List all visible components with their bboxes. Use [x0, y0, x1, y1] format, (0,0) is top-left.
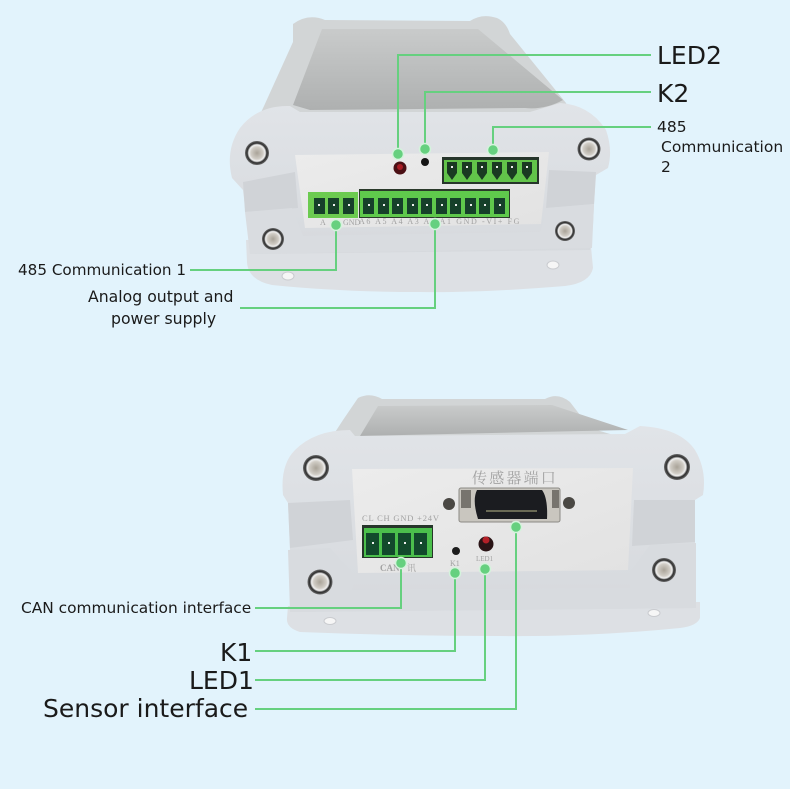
panel caption: sensor port: 传感器端口 — [472, 469, 558, 487]
callout: LED2 — [392, 41, 722, 160]
lower lip — [245, 204, 594, 254]
device: top module: A6 A5 A4 A3 A2 A1 GND -VI+ FG — [359, 217, 521, 226]
panel captions: CL CH GND +24V — [362, 513, 440, 523]
6-pin terminal — [442, 157, 539, 184]
callout: sensor interface — [43, 522, 522, 723]
device: top module — [230, 16, 610, 292]
side recesses — [288, 500, 353, 548]
mounting holes — [324, 618, 336, 624]
callout: 485 Communication 2: 2 — [661, 158, 671, 176]
screws — [303, 455, 329, 481]
device: top module: GND — [343, 218, 361, 227]
callout: analog output and power supply — [88, 218, 440, 328]
mounting holes — [282, 272, 294, 280]
callout: 485 Communication 1 — [18, 220, 342, 279]
LED — [478, 536, 494, 552]
panel — [295, 152, 549, 228]
callout: LED2: LED2 — [657, 41, 722, 70]
lid sides — [330, 395, 630, 440]
callout: CAN communication interface — [21, 558, 406, 617]
10-pin terminal — [359, 189, 510, 218]
lid top — [293, 29, 563, 110]
sensor connector — [443, 488, 575, 522]
callout: analog output and power supply: Analog output and — [88, 287, 233, 306]
callout: LED1 — [189, 564, 490, 695]
panel labels: A — [320, 218, 326, 227]
lid top — [360, 405, 628, 436]
lower lip — [288, 543, 696, 612]
callout: K2 — [420, 79, 689, 154]
screws — [245, 141, 269, 165]
front frame — [230, 103, 610, 254]
button hole — [452, 547, 460, 555]
device: bottom module: 讯 — [407, 563, 416, 573]
callout: K2: K2 — [657, 79, 689, 108]
3-pin terminal — [308, 192, 358, 218]
flange — [287, 602, 700, 636]
callout: 485 Communication 1: 485 Communication 1 — [18, 261, 186, 279]
front frame — [282, 426, 704, 612]
callout: sensor interface: Sensor interface — [43, 694, 248, 723]
flange — [246, 236, 593, 292]
callout: analog output and power supply: power supply — [111, 309, 216, 328]
callout: 485 Communication 2: 485 — [657, 118, 687, 136]
device: bottom module: CAN — [380, 563, 400, 573]
callout: CAN communication interface: CAN communication interface — [21, 599, 251, 617]
lid sides — [255, 16, 575, 125]
panel — [352, 468, 633, 573]
callout: 485 Communication 2: Communication — [661, 138, 783, 156]
callout: LED1: LED1 — [189, 666, 254, 695]
device: bottom module: K1 — [450, 559, 460, 568]
LED — [394, 162, 406, 174]
CAN terminal — [362, 525, 433, 558]
device: bottom module — [282, 395, 704, 636]
device: bottom module: LED1 — [476, 555, 494, 563]
side recesses — [243, 172, 298, 212]
callout: K1: K1 — [220, 638, 252, 667]
button hole — [421, 158, 429, 166]
callout: K1 — [220, 568, 460, 667]
callout: 485 Communication 2 — [488, 118, 783, 176]
